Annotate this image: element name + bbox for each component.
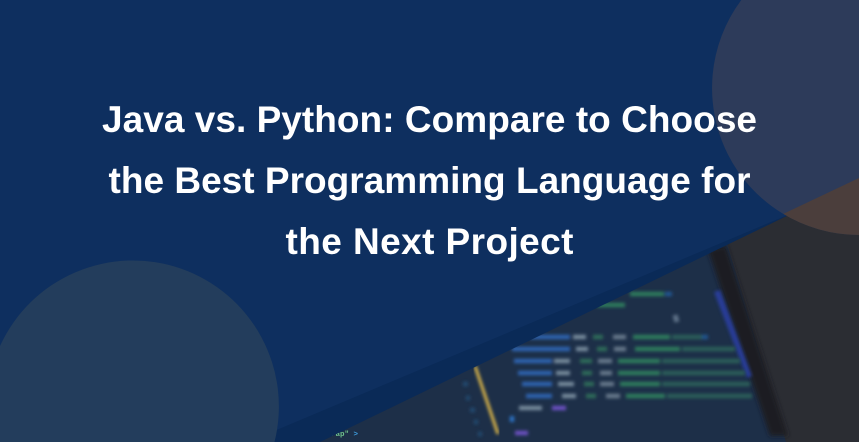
blue screen reflection xyxy=(714,290,752,378)
circle: top right xyxy=(700,0,859,240)
yellow line xyxy=(475,366,498,434)
laptop bezel xyxy=(728,216,859,442)
title: the Best Programming Language for xyxy=(108,160,750,201)
title: the Next Project xyxy=(286,221,574,262)
circle: bottom left xyxy=(0,260,279,442)
small code tag: rap" > xyxy=(331,431,359,439)
blurred code screen photo xyxy=(320,216,859,442)
code rows xyxy=(463,294,752,434)
title: Java vs. Python: Compare to Choose xyxy=(102,99,757,140)
title xyxy=(102,99,757,262)
